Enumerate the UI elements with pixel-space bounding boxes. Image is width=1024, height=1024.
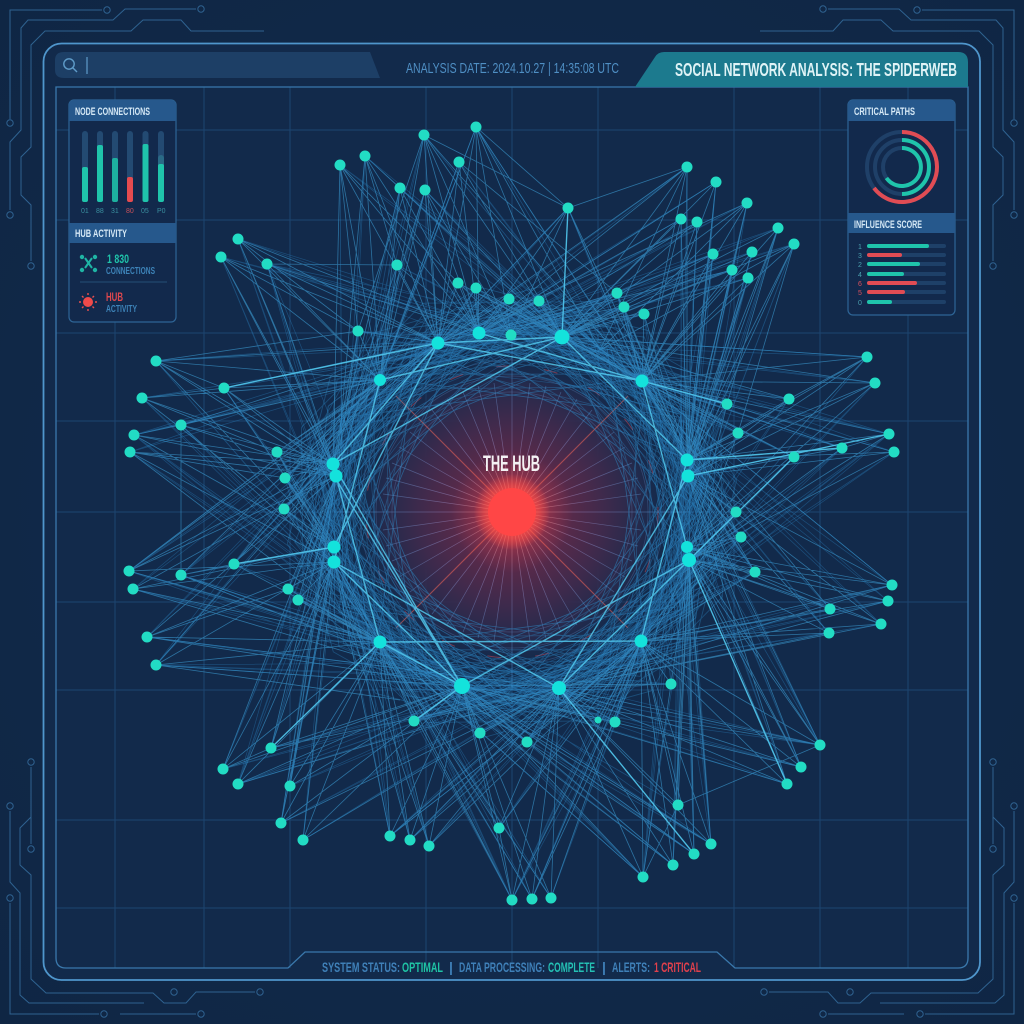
horizontal bar chart: 2: [858, 262, 862, 269]
analysis date: ANALYSIS DATE: 2024.10.27 | 14:35:08 UTC: [406, 61, 619, 77]
panel: critical paths and influence score: [848, 100, 955, 315]
hub spokes: [337, 337, 687, 687]
heading band: hub activity: [69, 223, 176, 243]
bar chart: 01: [81, 208, 89, 215]
heading: node connections: NODE CONNECTIONS: [75, 106, 150, 118]
status bar: [322, 959, 701, 975]
extra cross-ring weave, counter-clockwise: [129, 127, 894, 900]
icon: network connections: [80, 255, 97, 272]
title tab: [635, 52, 968, 87]
radial ring chart: [867, 132, 937, 202]
ring weave of chords: [101, 101, 923, 923]
circuit traces: left side: [7, 6, 264, 1017]
heading band: hub activity: HUB ACTIVITY: [75, 228, 127, 240]
bar chart: P0: [157, 208, 166, 215]
horizontal bar chart: 0: [858, 300, 862, 307]
stat: hub activity: HUB: [106, 290, 123, 304]
stat: hub activity: ACTIVITY: [106, 303, 137, 315]
bar chart: 05: [141, 208, 149, 215]
stat: connections: 1 830: [107, 252, 129, 266]
stat: hub activity: [106, 290, 137, 315]
panel: node connections and hub activity: [69, 100, 176, 322]
hub label: THE HUB: [483, 451, 540, 476]
icon: search: [64, 59, 77, 72]
status bar: SYSTEM STATUS:: [322, 959, 400, 975]
horizontal bar chart: [858, 244, 946, 307]
heading band: influence score: INFLUENCE SCORE: [854, 219, 922, 231]
bar chart: 31: [111, 208, 119, 215]
network nodes: [124, 122, 900, 906]
status bar: COMPLETE: [548, 959, 595, 975]
icon: hub activity: [79, 293, 97, 311]
status bar: DATA PROCESSING:: [459, 959, 545, 975]
faint inner rings: [360, 360, 664, 664]
hub glow: [352, 352, 672, 672]
bright highlighted links: [224, 208, 889, 854]
status bar: |: [449, 959, 453, 975]
extra cross-ring weave, clockwise: [129, 127, 894, 900]
horizontal bar chart: 1: [858, 244, 862, 251]
central hub: [474, 474, 550, 550]
bar chart: 80: [126, 208, 134, 215]
horizontal bar chart: 6: [858, 281, 862, 288]
stat: connections: [106, 252, 155, 277]
status bar: ALERTS:: [612, 959, 650, 975]
network graph: [101, 101, 923, 923]
circuit traces: right side: [760, 6, 1017, 1017]
status bar: |: [602, 959, 606, 975]
status bar: 1 CRITICAL: [654, 959, 701, 975]
red fragments around the ring: [366, 366, 658, 658]
heading band: influence score: [848, 213, 955, 233]
horizontal bar chart: 5: [858, 290, 862, 297]
bar chart: 88: [96, 208, 104, 215]
horizontal bar chart: 3: [858, 253, 862, 260]
ring hub nodes: [326, 326, 696, 695]
status bar: OPTIMAL: [402, 959, 443, 975]
horizontal bar chart: 4: [858, 272, 862, 279]
stat: connections: CONNECTIONS: [106, 265, 155, 277]
bar chart: [81, 131, 166, 215]
search bar: [55, 52, 380, 78]
heading: critical paths: CRITICAL PATHS: [854, 106, 915, 118]
inner frame: [56, 87, 968, 968]
outer fan connections: [129, 127, 894, 900]
